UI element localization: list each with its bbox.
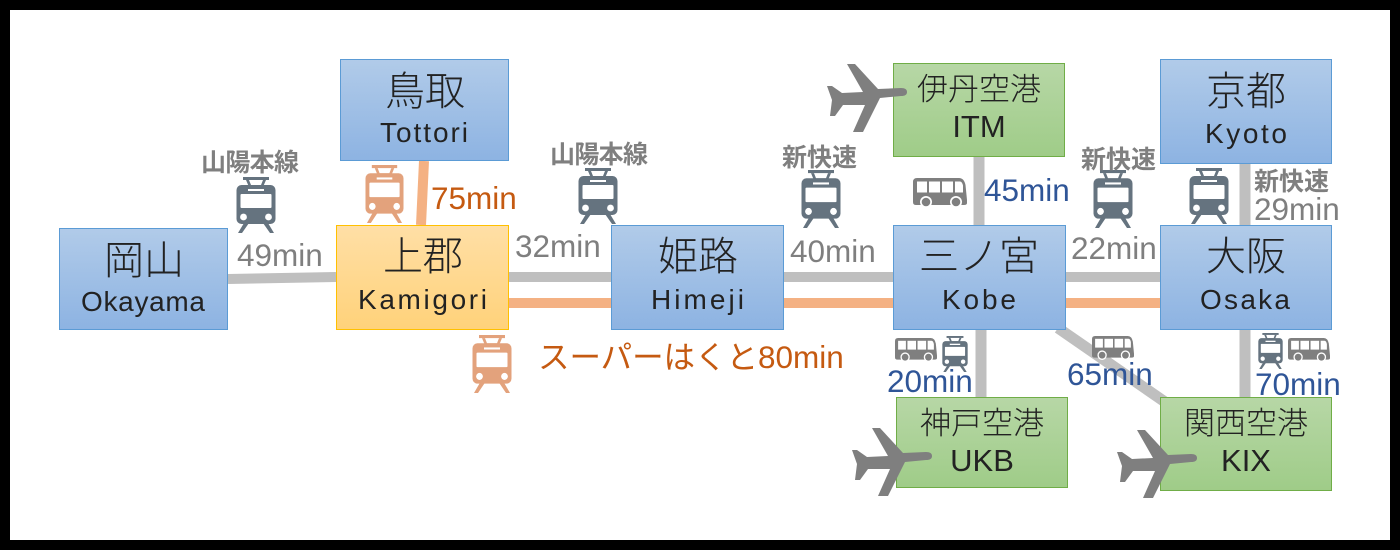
airport: Itami [894,64,1064,156]
time: Kobe-Osaka: 22min [1071,230,1157,266]
time: Okayama-Kamigori: 49min [237,237,323,273]
station: Kobe: Kobe [942,284,1016,315]
station: Kyoto: Kyoto [1205,118,1287,149]
icon: bus Osaka-Kansai [1288,338,1330,362]
airport: Kansai [1160,398,1332,490]
time: Kyoto-Osaka: 29min [1254,191,1340,227]
airport: Kobe: 神戸空港 [920,406,1044,441]
label: new rapid Kyoto-Osaka: 新快速 [1254,168,1329,196]
station: Kyoto: 京都 [1206,70,1286,114]
icon: train Kansai airport [1258,333,1283,369]
icon: plane Kobe [852,428,932,496]
route lines [228,157,1245,402]
label: new rapid Himeji-Kobe: 新快速 [782,144,857,172]
station: Tottori: 鳥取 [385,70,465,114]
airport: Itami: 伊丹空港 [917,72,1041,107]
time: Kamigori-Himeji: 32min [515,228,601,264]
icon: bus Kobe airport [895,338,937,362]
station: Himeji: 姫路 [658,235,738,279]
station: Osaka: 大阪 [1206,235,1286,279]
station: Okayama: Okayama [81,286,205,317]
label: Sanyo line west: 山陽本線 [201,149,299,177]
icon: train Super Hakuto [472,335,512,393]
station: Kyoto [1160,60,1332,164]
station: Kobe: 三ノ宮 [919,235,1039,279]
time: Kobe-Kansai: 65min [1067,356,1153,392]
station: Tottori [340,60,508,160]
label: Super Hakuto 80min: スーパーはくと [538,339,758,375]
airport: Kansai: KIX [1221,443,1271,478]
station: Okayama [60,228,228,330]
station: Himeji [612,226,784,330]
station: Okayama: 岡山 [104,239,184,283]
icon: train Kobe airport [942,336,968,372]
time: Kobe airport: 20min [887,363,973,399]
icon: train Kyoto-Osaka [1190,168,1228,224]
airport: Kansai: 関西空港 [1184,406,1308,441]
station: Kamigori: 上郡 [383,235,463,279]
station: Himeji: Himeji [651,284,744,315]
airport: Kobe [896,398,1068,488]
icon: train Sanyo line west [236,177,276,233]
icon: train Sanyo line east [578,168,618,224]
station: Kamigori: Kamigori [358,284,487,315]
airport: Kobe: UKB [950,443,1014,478]
station: Osaka [1160,226,1332,330]
label: Sanyo line east: 山陽本線 [550,141,648,169]
icon: plane Itami [827,64,907,132]
station: Tottori: Tottori [380,117,468,148]
time: Osaka-Kansai: 70min [1255,366,1341,402]
time: Tottori: 75min [431,180,517,216]
time: Itami: 45min [984,172,1070,208]
icon: bus Itami [913,178,967,208]
airport: Itami: ITM [952,109,1006,144]
icon: train Tottori [365,165,404,223]
label: Super Hakuto 80min: 80min [758,339,844,375]
station: Osaka: Osaka [1200,284,1290,315]
icon: train Kobe-Osaka [1094,170,1132,228]
time: Himeji-Kobe: 40min [790,233,876,269]
icon: plane Kansai [1117,430,1197,498]
icon: train Himeji-Kobe [802,170,840,228]
icon: bus Kobe-Kansai [1092,336,1134,360]
station: Kamigori [336,226,508,330]
station: Kobe [894,226,1066,330]
label: new rapid Kobe-Osaka: 新快速 [1081,146,1156,174]
